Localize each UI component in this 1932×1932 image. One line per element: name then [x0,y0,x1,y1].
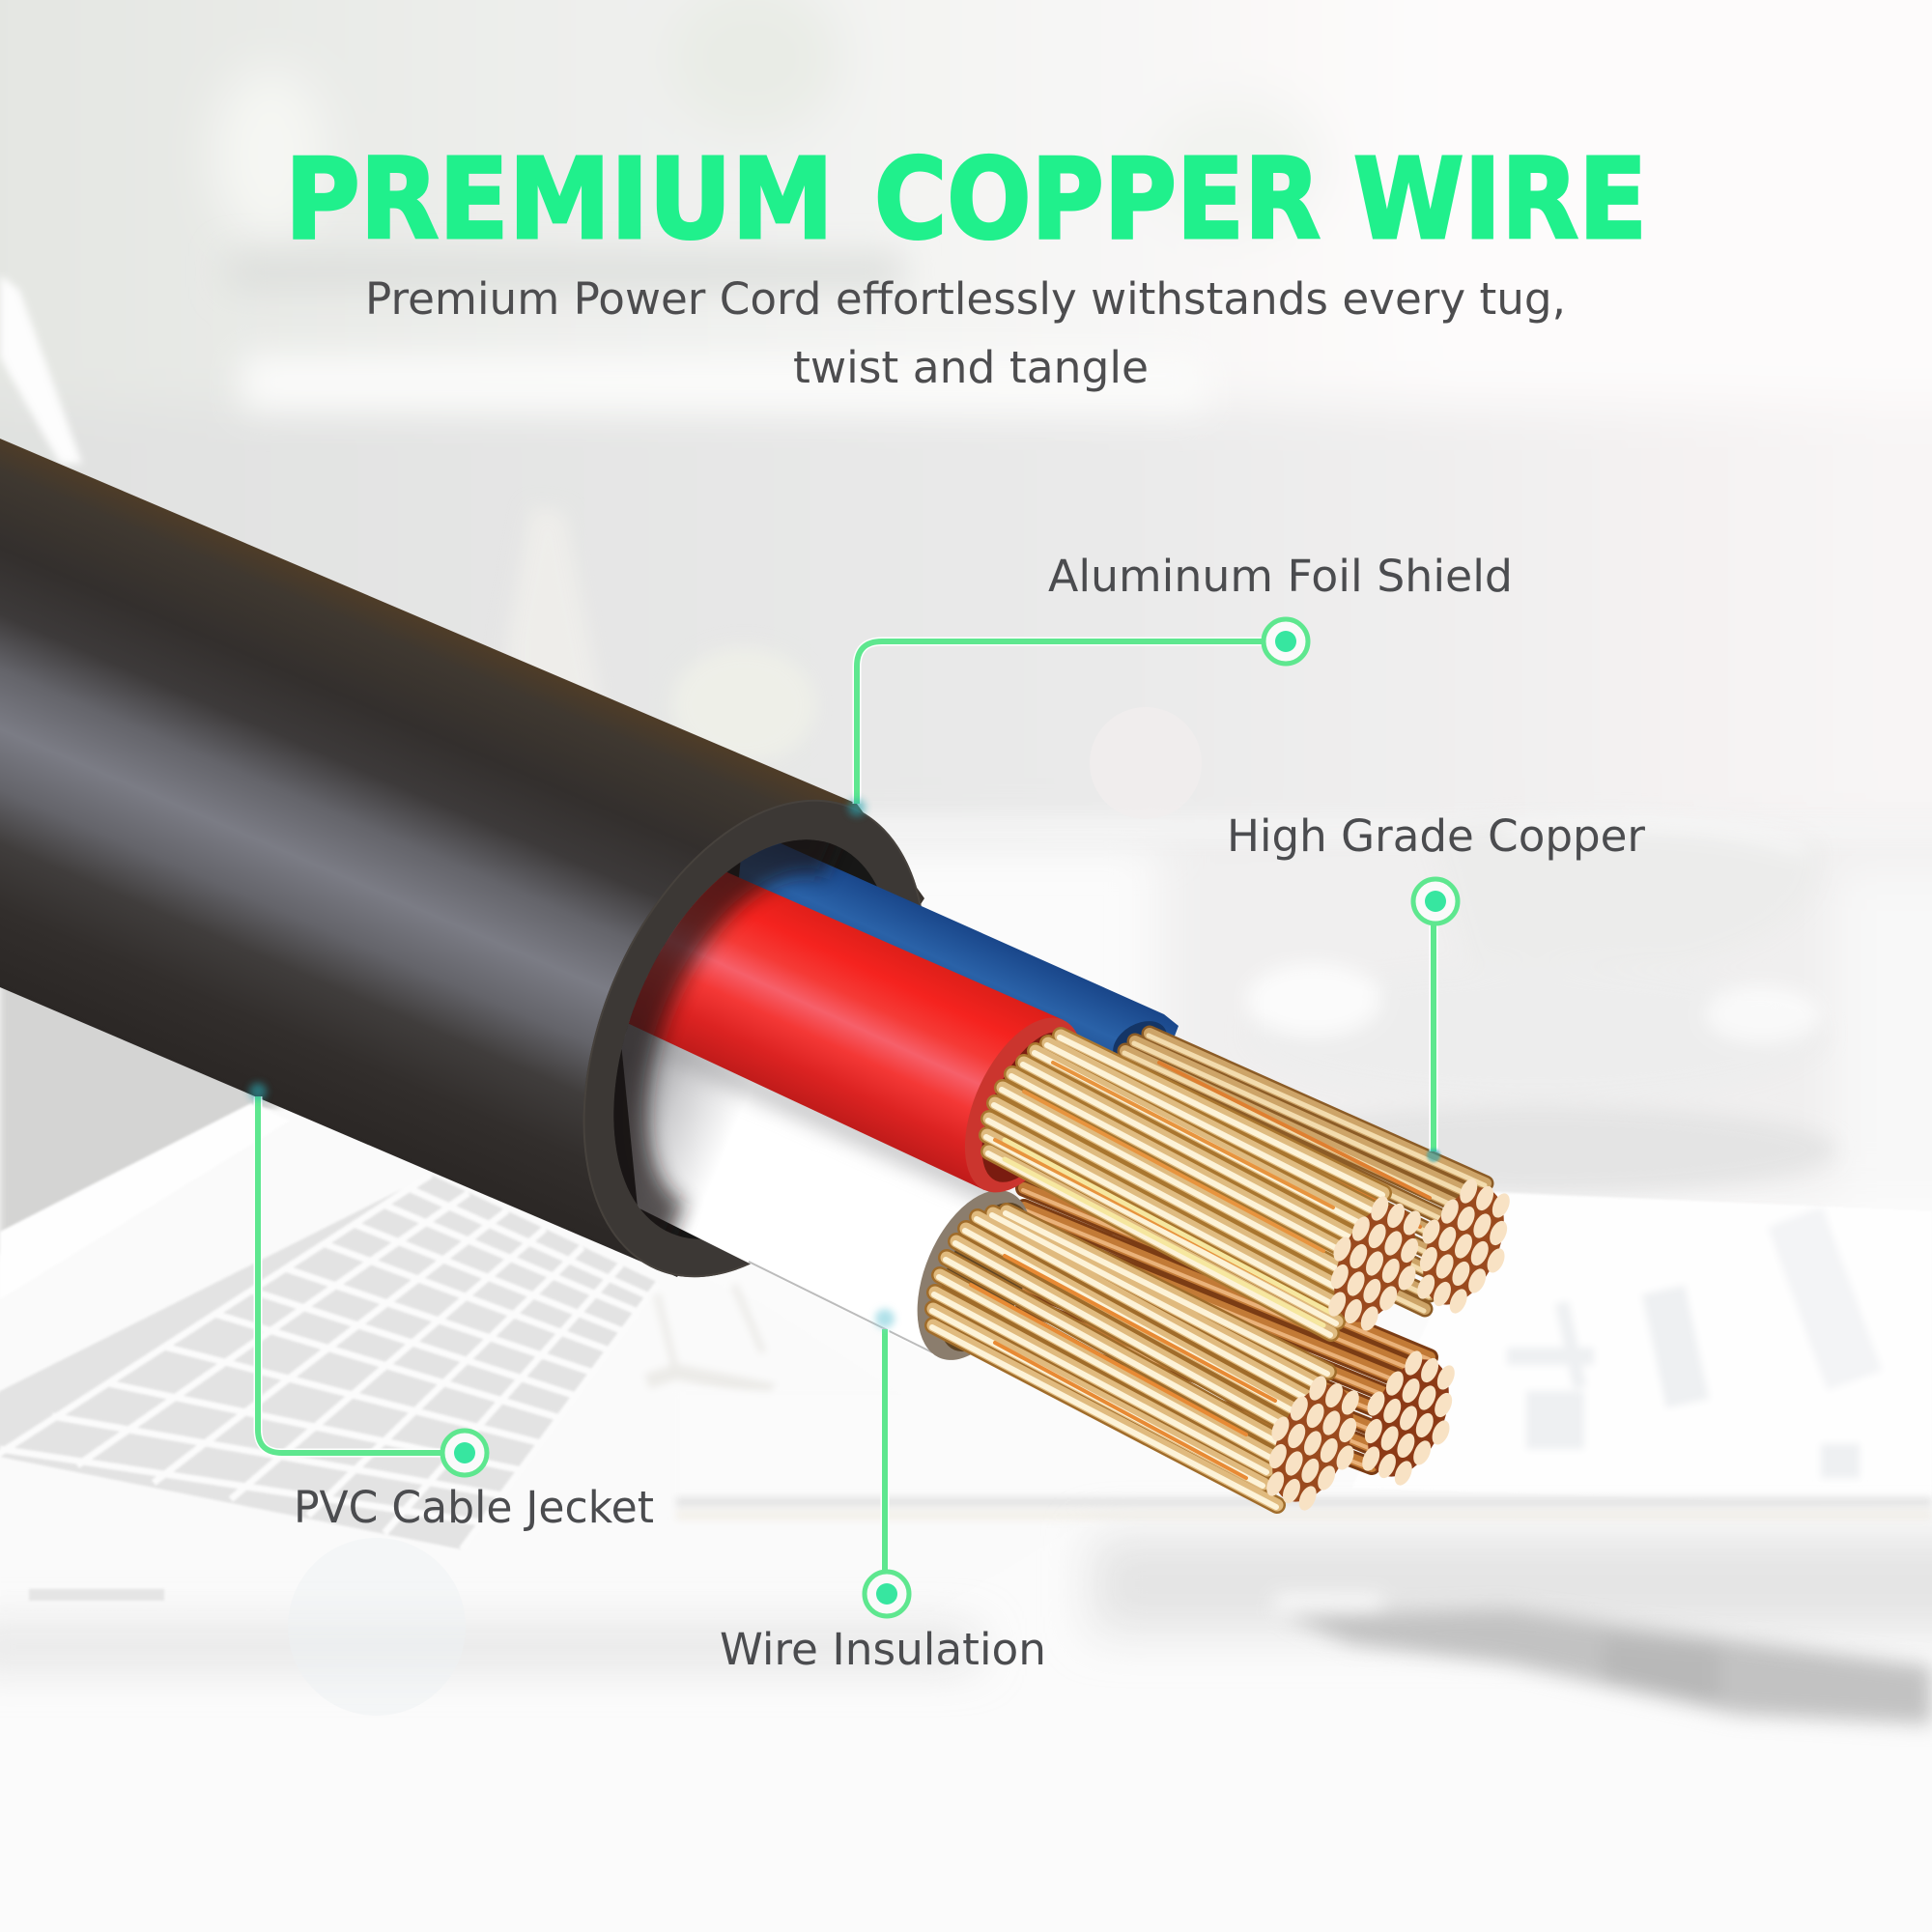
laptop body [0,1106,1092,1615]
subtitle text: twist and tangle [793,342,1149,393]
callout: High Grade Copper [1227,810,1645,1162]
bokeh disc [288,1538,466,1716]
callout: Wire Insulation: Wire Insulation [720,1624,1046,1675]
pen [1275,1596,1932,1724]
blue insulated wire [739,843,1179,1054]
shadow at jacket mouth [622,843,838,1233]
title: WIRE [1353,135,1647,265]
copper strands: blue wire bundle [1110,1034,1529,1323]
paper text blur [1507,1207,1882,1478]
callout: PVC Cable Jecket [249,1083,654,1533]
callout: High Grade Copper: High Grade Copper [1227,810,1645,862]
subtitle text [365,273,1566,393]
cup and saucer [1246,816,1835,1193]
black PVC jacket [0,439,993,1329]
notebook under the cable [676,1391,1507,1517]
shelf bands [227,255,1208,410]
paper [1352,1192,1932,1507]
copper strands: rear bundle [1023,1188,1474,1495]
subtitle text: Premium Power Cord effortlessly withstands every tug, [365,273,1566,325]
red insulated wire [628,872,1077,1192]
laptop screen corner [0,275,82,464]
white insulated wire [622,1020,1028,1360]
vase, plant and bokeh [507,507,1932,841]
title [285,135,1647,265]
title: COPPER [874,135,1321,265]
callout: PVC Cable Jecket: PVC Cable Jecket [294,1482,654,1533]
paper shadow and desk bands [676,1497,1932,1520]
cable illustration [0,439,1529,1520]
copper strands: red wire bundle [986,1036,1440,1341]
keyboard [0,1175,659,1549]
callout: Aluminum Foil Shield: Aluminum Foil Shield [1048,551,1513,602]
left laptop screen [0,976,290,1256]
callout: Aluminum Foil Shield [848,551,1513,816]
copper strands: white wire bundle [932,1211,1378,1520]
laptop front edge [29,1589,164,1601]
clip under the cable [647,1285,773,1391]
callout: Wire Insulation [720,1309,1046,1675]
wires emerging from jacket [609,827,1529,1520]
title: PREMIUM [285,135,834,265]
upper desk backdrop [0,0,1932,1198]
